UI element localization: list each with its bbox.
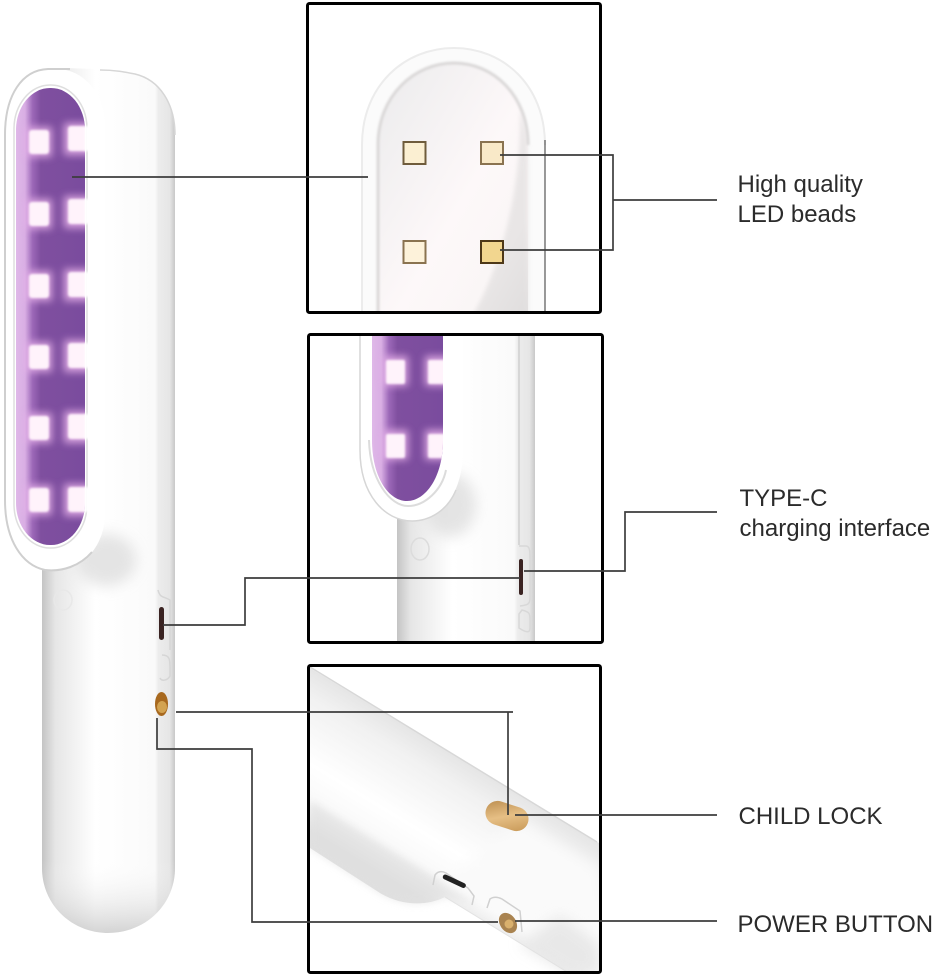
shadow below head [76, 534, 136, 586]
panel 3 bottom body [445, 820, 600, 975]
usb port housing [433, 872, 474, 905]
panel: TYPE-C port close-up [308, 330, 602, 650]
leader lines [72, 155, 717, 922]
label: child lock: CHILD LOCK [738, 803, 883, 830]
purple UV window [16, 88, 92, 545]
label: Type-C: TYPE-C [740, 485, 828, 512]
panel 2 head rim [397, 464, 460, 520]
panel 1 device shell [362, 48, 545, 320]
LED bead top left [404, 142, 426, 164]
label: LED beads: LED beads [738, 201, 856, 228]
power button [498, 912, 518, 934]
panel: buttons close-up [308, 666, 600, 975]
panel 3 diagonal body [310, 668, 599, 975]
panel 2 port [519, 559, 523, 595]
head rim [5, 69, 105, 570]
panel 1 inner face [378, 63, 528, 320]
power button housing [487, 897, 522, 932]
wand port housing [158, 590, 170, 680]
LED bead bottom left [404, 241, 426, 263]
wand body [42, 68, 175, 933]
panel 2 purple window [372, 336, 443, 501]
panel 2 round mark [411, 538, 429, 560]
label: power button: POWER BUTTON [738, 911, 933, 938]
LED bead bottom right [481, 241, 503, 263]
window outline [14, 85, 87, 548]
wand button [155, 692, 168, 716]
panel 3 lower shade [312, 804, 458, 904]
device: full UV wand [5, 68, 175, 933]
LED bead top right [481, 142, 503, 164]
wand LED glow beyond window [85, 126, 91, 512]
panel 2 body [397, 330, 535, 650]
label: LED beads: High quality [738, 171, 863, 198]
child lock button [486, 800, 528, 832]
usb port [442, 874, 466, 888]
panel 2 port housing [519, 546, 530, 606]
label: Type-C [740, 485, 930, 542]
wand charging port [159, 607, 164, 640]
panel: LED beads close-up [308, 4, 600, 320]
label: Type-C: charging interface [740, 515, 930, 542]
label: LED beads [738, 171, 863, 228]
